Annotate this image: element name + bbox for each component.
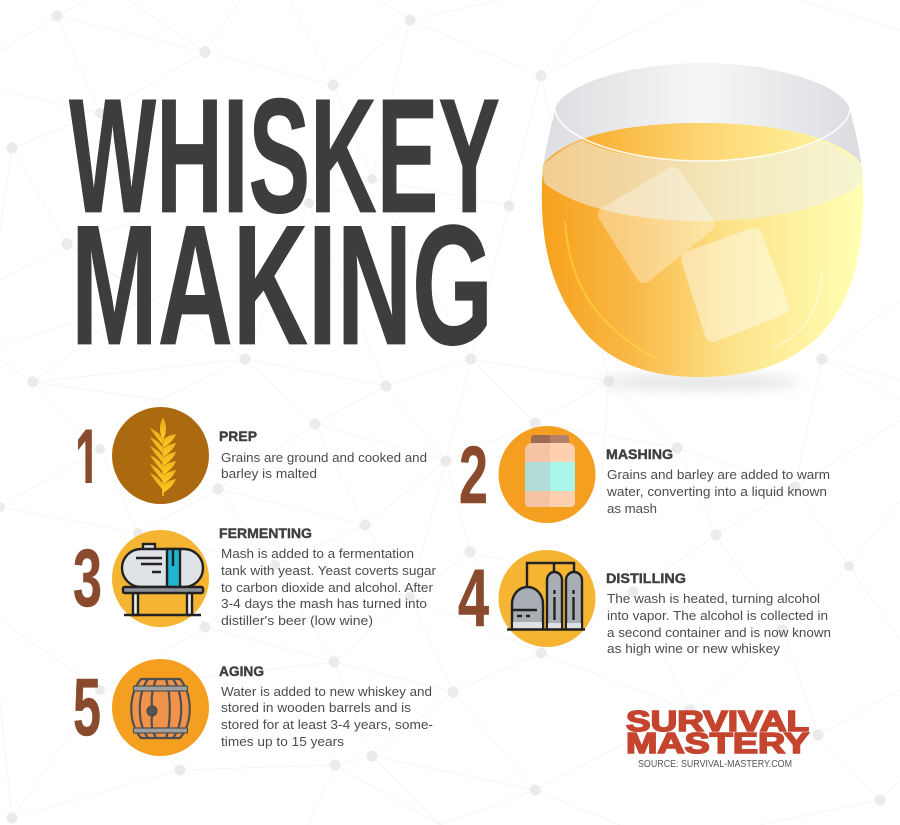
circle 2 bbox=[498, 426, 596, 523]
description: 3-4 days the mash has turned into bbox=[221, 596, 427, 611]
description: Water is added to new whiskey and bbox=[221, 684, 432, 699]
glass upper wall bbox=[543, 63, 862, 170]
description: as high wine or new whiskey bbox=[607, 641, 781, 656]
glass reflection right bbox=[772, 270, 822, 348]
description: Grains are ground and cooked and bbox=[221, 450, 427, 465]
heading: MASHING bbox=[606, 446, 673, 462]
ice cube 2 bbox=[689, 236, 781, 334]
description: a second container and is now known bbox=[607, 625, 831, 640]
description bbox=[606, 467, 830, 516]
description: stored in wooden barrels and is bbox=[221, 700, 412, 715]
liquid back surface bbox=[582, 123, 820, 161]
icon: fermentation tank bbox=[122, 544, 203, 615]
icon: jar bbox=[525, 435, 575, 507]
description: stored for at least 3-4 years, some- bbox=[221, 717, 433, 732]
step 1: prep bbox=[75, 407, 427, 513]
description: to carbon dioxide and alcohol. After bbox=[221, 580, 434, 595]
logo: survival mastery: SURVIVAL bbox=[626, 706, 809, 738]
circle 3 bbox=[112, 530, 209, 627]
source line: SOURCE: SURVIVAL-MASTERY.COM bbox=[638, 759, 792, 770]
heading: FERMENTING bbox=[219, 525, 312, 541]
step 1: prep: 1 bbox=[75, 410, 100, 513]
circle 4 bbox=[498, 550, 596, 647]
description: The wash is heated, turning alcohol bbox=[607, 591, 820, 606]
description bbox=[221, 450, 427, 481]
heading: DISTILLING bbox=[606, 570, 686, 586]
glass rim bbox=[555, 110, 850, 161]
description bbox=[221, 684, 433, 749]
icon: barrel bbox=[131, 679, 190, 738]
description: water, converting into a liquid known bbox=[606, 484, 827, 499]
ice cube 1 bbox=[606, 175, 707, 275]
glass reflection left bbox=[565, 222, 655, 358]
circle 1 bbox=[112, 407, 209, 504]
description: as mash bbox=[607, 501, 657, 516]
description: distiller's beer (low wine) bbox=[221, 613, 373, 628]
title bbox=[69, 65, 500, 380]
description: Mash is added to a fermentation bbox=[221, 546, 414, 561]
icon: wheat bbox=[150, 417, 176, 496]
description bbox=[607, 591, 831, 656]
logo: survival mastery bbox=[626, 706, 809, 770]
logo: survival mastery: MASTERY bbox=[626, 728, 809, 760]
description: Grains and barley are added to warm bbox=[607, 467, 830, 482]
description: into vapor. The alcohol is collected in bbox=[607, 608, 828, 623]
circle 5 bbox=[112, 659, 209, 756]
description: times up to 15 years bbox=[221, 734, 345, 749]
glass shadow bbox=[600, 373, 800, 391]
icon: still bbox=[507, 563, 585, 630]
step 5: aging: 5 bbox=[73, 661, 101, 752]
liquid front surface bbox=[543, 140, 863, 221]
step 3: fermenting: 3 bbox=[73, 532, 102, 623]
description: barley is malted bbox=[221, 466, 317, 481]
icon: whiskey glass bbox=[542, 63, 863, 391]
heading: PREP bbox=[219, 428, 257, 444]
description: tank with yeast. Yeast coverts sugar bbox=[221, 563, 437, 578]
description bbox=[221, 546, 437, 628]
heading: AGING bbox=[219, 663, 264, 679]
liquid body bbox=[542, 123, 863, 377]
